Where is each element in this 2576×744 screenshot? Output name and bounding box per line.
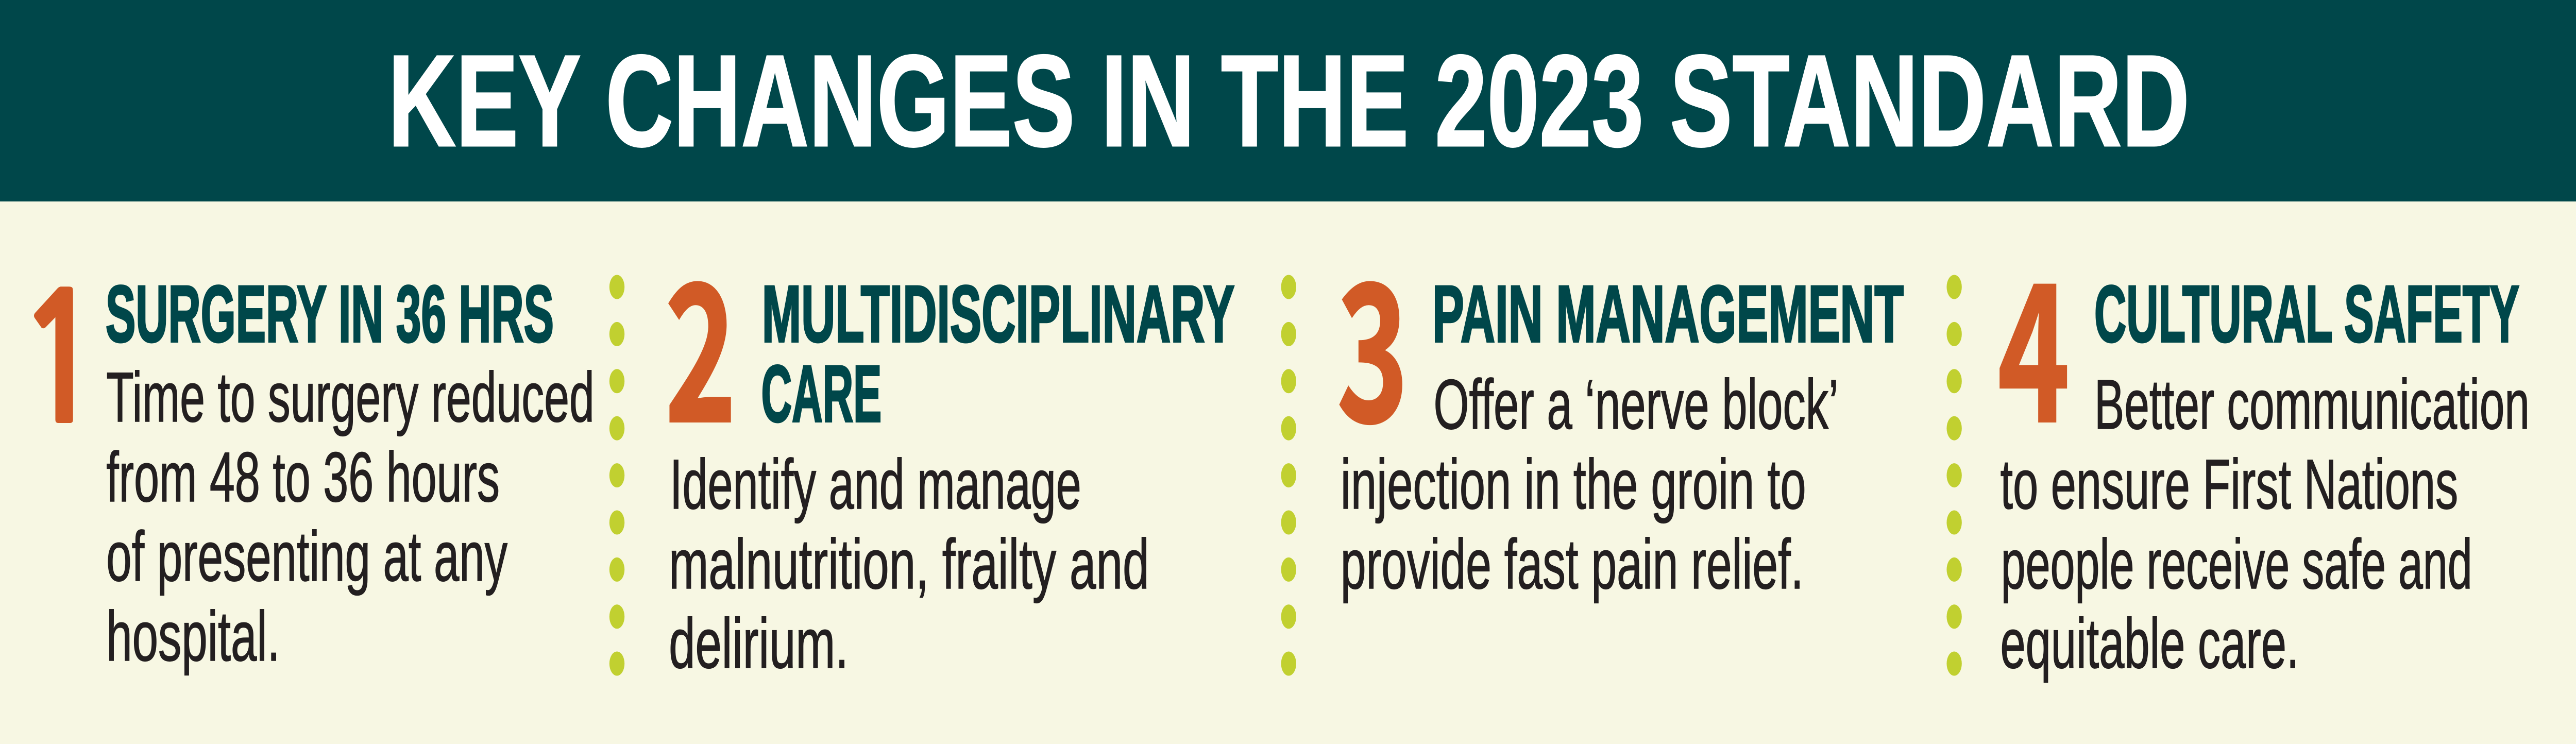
text block: pain description: injection in the groin to xyxy=(1341,446,1806,524)
text block: cultural safety description: equitable care. xyxy=(2001,605,2299,683)
number 3: 3 xyxy=(1337,202,1409,477)
text block: pain description: provide fast pain relief. xyxy=(1341,526,1804,604)
text block: care description: delirium. xyxy=(669,605,849,683)
text block: pain description xyxy=(1341,366,1839,604)
text block: care description: Identify and manage xyxy=(670,446,1081,524)
panel: multidisciplinary care xyxy=(665,202,1234,683)
text block: cultural safety description: people receive safe and xyxy=(2001,526,2472,604)
number 4: 4 xyxy=(1998,202,2070,477)
heading: cultural safety: CULTURAL SAFETY xyxy=(2094,268,2519,359)
dotted divider 2 xyxy=(1281,275,1296,676)
text block: pain description: Offer a ‘nerve block’ xyxy=(1433,366,1839,444)
title: KEY CHANGES IN THE 2023 STANDARD xyxy=(388,28,2190,174)
number 2: 2 xyxy=(665,202,736,477)
heading: multidisciplinary care xyxy=(761,268,1234,439)
dotted divider 1 xyxy=(609,275,624,676)
heading: multidisciplinary care: MULTIDISCIPLINARY xyxy=(762,268,1234,359)
title banner xyxy=(0,0,2576,201)
text block: care description xyxy=(669,446,1149,683)
number 1: 1 xyxy=(16,273,106,448)
panel: pain management xyxy=(1337,202,1904,604)
text block: cultural safety description: to ensure First Nations xyxy=(2001,446,2458,524)
text block: surgery description: from 48 to 36 hours xyxy=(106,438,500,517)
dotted divider 3 xyxy=(1946,275,1962,676)
text block: care description: malnutrition, frailty and xyxy=(669,526,1149,604)
text block: surgery description: hospital. xyxy=(106,598,280,676)
text block: surgery description: of presenting at any xyxy=(106,518,507,596)
text block: surgery description: Time to surgery reduced xyxy=(106,359,595,437)
panel: cultural safety xyxy=(1998,202,2530,683)
heading: pain management: PAIN MANAGEMENT xyxy=(1432,268,1904,359)
text block: surgery description xyxy=(106,359,595,676)
panel: surgery in 36 hrs xyxy=(16,268,595,676)
heading: surgery in 36 hrs: SURGERY IN 36 HRS xyxy=(106,268,554,359)
heading: multidisciplinary care: CARE xyxy=(761,348,882,439)
text block: cultural safety description: Better communication xyxy=(2094,366,2530,444)
text block: cultural safety description xyxy=(2001,366,2530,683)
